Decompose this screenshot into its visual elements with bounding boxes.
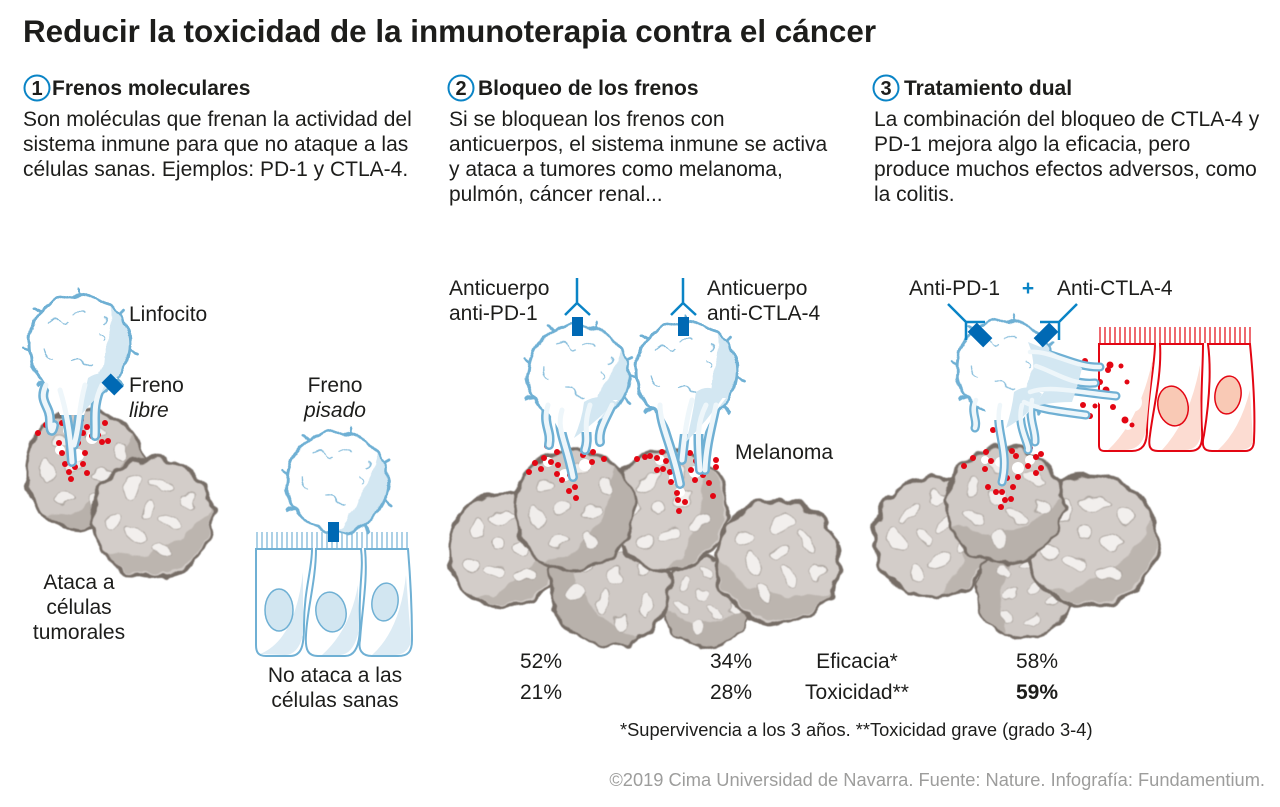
label: freno pisado: Freno — [308, 374, 362, 397]
description 3: La combinación del bloqueo de CTLA-4 y — [874, 108, 1260, 131]
label: ataca tumorales: Ataca a — [43, 571, 115, 594]
description 3: produce muchos efectos adversos, como — [874, 158, 1257, 181]
pressed brake — [328, 522, 339, 542]
description 3: la colitis. — [874, 183, 955, 206]
lymphocyte attacking both — [944, 306, 1116, 482]
label: no ataca: No ataca a las — [268, 664, 402, 687]
label: anticuerpo anti-PD-1: anti-PD-1 — [449, 302, 538, 325]
efficacy row: 58% — [1016, 650, 1058, 673]
label: anti-CTLA-4: Anti-CTLA-4 — [1057, 277, 1173, 300]
tumor cluster — [849, 425, 1167, 656]
heading 3: Tratamiento dual — [904, 77, 1072, 100]
description 2: pulmón, cáncer renal... — [449, 183, 663, 206]
toxicity row: 28% — [710, 681, 752, 704]
stats table — [520, 650, 1058, 704]
lymphocyte attacking — [23, 289, 138, 462]
label: anti-PD-1: Anti-PD-1 — [909, 277, 1000, 300]
description 2: y ataca a tumores como melanoma, — [449, 158, 783, 181]
label: melanoma: Melanoma — [735, 441, 833, 464]
free brake — [102, 374, 123, 395]
label: freno libre: Freno — [129, 374, 184, 397]
label: freno libre: libre — [129, 399, 169, 422]
lymphocyte left — [508, 303, 653, 477]
heading 1: Frenos moleculares — [52, 77, 250, 100]
label: freno pisado: pisado — [303, 399, 366, 422]
antibody anti-CTLA-4 — [671, 278, 696, 336]
melanoma tumor cluster — [448, 428, 862, 665]
number badge 1: 1 — [31, 78, 43, 100]
label: anticuerpo anti-PD-1: Anticuerpo — [449, 277, 549, 300]
tumor cells attacked — [25, 410, 230, 595]
panel: 2 bloqueo de los frenos — [448, 76, 862, 665]
description 1: Son moléculas que frenan la actividad del — [23, 108, 412, 131]
red granules and damage — [961, 355, 1142, 510]
red granules — [526, 438, 719, 514]
heading 2: Bloqueo de los frenos — [478, 77, 699, 100]
antibody anti-CTLA-4 on lymphocyte — [1034, 304, 1077, 347]
toxicity row: 21% — [520, 681, 562, 704]
antibody anti-PD-1 — [565, 278, 590, 336]
lymphocyte right — [630, 316, 745, 484]
toxicity row: Toxicidad** — [805, 681, 909, 704]
description 1: células sanas. Ejemplos: PD-1 y CTLA-4. — [23, 158, 408, 181]
efficacy row: 34% — [710, 650, 752, 673]
damaged healthy cells — [1099, 327, 1254, 451]
panel: 3 tratamiento dual — [849, 76, 1260, 656]
description 2: Si se bloquean los frenos con — [449, 108, 725, 131]
toxicity row: 59% — [1016, 681, 1058, 704]
efficacy row: 52% — [520, 650, 562, 673]
toxicity row — [520, 681, 1058, 704]
number badge 1 — [24, 76, 50, 100]
description 2: anticuerpos, el sistema inmune se activa — [449, 133, 828, 156]
number badge 2 — [448, 76, 474, 100]
label: anticuerpo anti-CTLA-4: Anticuerpo — [707, 277, 807, 300]
label: no ataca: células sanas — [271, 689, 399, 712]
title: Reducir la toxicidad de la inmunoterapia contra el cáncer — [23, 14, 876, 49]
efficacy row — [520, 650, 1058, 673]
label: anticuerpo anti-CTLA-4: anti-CTLA-4 — [707, 302, 821, 325]
footnote: *Supervivencia a los 3 años. **Toxicidad grave (grado 3-4) — [620, 719, 1093, 740]
credit: ©2019 Cima Universidad de Navarra. Fuente: Nature. Infografía: Fundamentium. — [609, 769, 1265, 790]
description 3: PD-1 mejora algo la eficacia, pero — [874, 133, 1190, 156]
number badge 2: 2 — [455, 78, 467, 100]
panel: 1 frenos moleculares — [23, 76, 412, 712]
resting lymphocyte — [270, 413, 408, 546]
number badge 3: 3 — [880, 78, 892, 100]
efficacy row: Eficacia* — [816, 650, 898, 673]
healthy cells — [256, 532, 412, 656]
label: ataca tumorales: tumorales — [33, 621, 125, 644]
red granules — [35, 412, 111, 482]
label: ataca tumorales: células — [46, 596, 112, 619]
description 1: sistema inmune para que no ataque a las — [23, 133, 408, 156]
label: linfocito: Linfocito — [129, 303, 207, 326]
number badge 3 — [874, 76, 898, 100]
plus sign: + — [1022, 277, 1034, 300]
antibody anti-PD-1 on lymphocyte — [948, 304, 992, 347]
